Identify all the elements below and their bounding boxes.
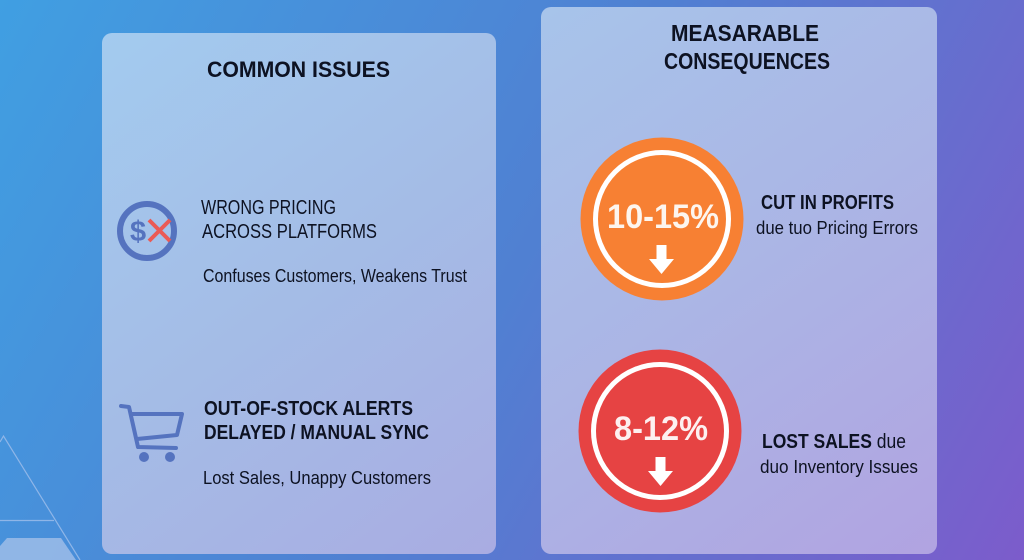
stat text: cut in profits: CUT IN PROFITS bbox=[761, 192, 894, 214]
issue: wrong pricing: Confuses Customers, Weakens Trust bbox=[203, 265, 467, 286]
arrow: down bbox=[648, 457, 673, 486]
issue: wrong pricing: ACROSS PLATFORMS bbox=[202, 221, 377, 243]
stat text: lost sales: LOST SALES due bbox=[762, 431, 906, 453]
stat badge: 10-15% bbox=[580, 138, 744, 300]
panel: common issues bbox=[102, 33, 496, 554]
stat badge: 10-15%: 10-15% bbox=[607, 198, 719, 236]
issue: wrong pricing: WRONG PRICING bbox=[201, 197, 336, 219]
stat text: lost sales bbox=[760, 431, 918, 477]
heading: common issues: COMMON ISSUES bbox=[207, 57, 390, 82]
decorative triangle, bottom left bbox=[0, 436, 80, 560]
issue: wrong pricing bbox=[201, 197, 467, 286]
stat text: cut in profits bbox=[756, 192, 918, 238]
stat badge: 8-12% bbox=[578, 350, 742, 512]
panel: measurable consequences bbox=[541, 7, 937, 554]
stat text: cut in profits: due tuo Pricing Errors bbox=[756, 217, 918, 238]
issue: out-of-stock alerts: DELAYED / MANUAL SYNC bbox=[204, 422, 429, 444]
arrow: down bbox=[649, 245, 674, 274]
heading: measurable consequences: MEASARABLE bbox=[671, 20, 819, 46]
heading: measurable consequences: CONSEQUENCES bbox=[664, 48, 830, 74]
stat text: lost sales: duo Inventory Issues bbox=[760, 456, 918, 477]
issue: out-of-stock alerts: Lost Sales, Unappy Customers bbox=[203, 467, 431, 488]
icon: price error: $ bbox=[130, 216, 146, 248]
heading: measurable consequences bbox=[664, 20, 830, 74]
icon: shopping cart bbox=[121, 406, 182, 462]
issue: out-of-stock alerts: OUT-OF-STOCK ALERTS bbox=[204, 398, 413, 420]
stat badge: 8-12%: 8-12% bbox=[614, 410, 708, 448]
icon: price error bbox=[120, 204, 174, 258]
issue: out-of-stock alerts bbox=[203, 398, 431, 488]
